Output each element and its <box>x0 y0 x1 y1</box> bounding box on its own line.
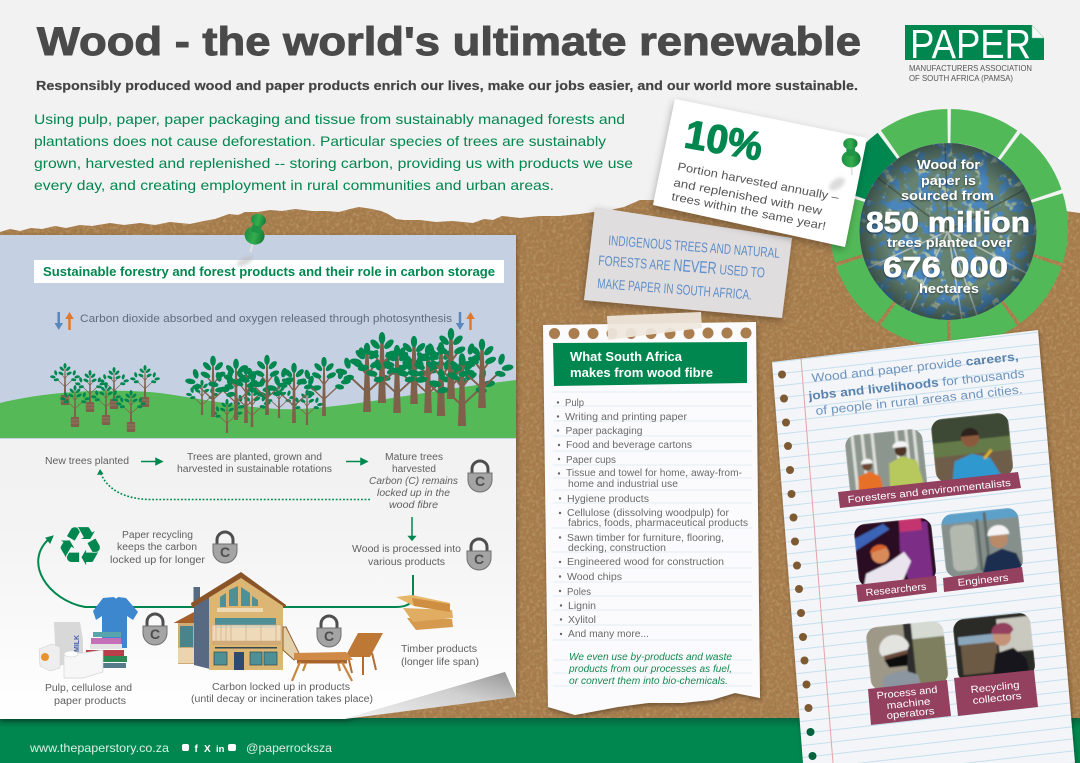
footer band <box>0 718 1080 763</box>
intro paragraph: Using pulp, paper, paper packaging and tissue from sustainably managed forests and <box>34 111 625 127</box>
logo: Paper Manufacturers Association: OF SOUTH AFRICA (PAMSA) <box>909 74 1013 83</box>
product list: Paper packaging <box>566 426 642 437</box>
by-products note: or convert them into bio-chemicals. <box>569 676 728 687</box>
grey note: indigenous trees: INDIGENOUS TREES AND NATURAL <box>608 232 781 261</box>
careers statement: of people in rural areas and cities. <box>815 382 1023 418</box>
ring caption: Wood for <box>917 158 980 172</box>
product list: Writing and printing paper <box>565 412 688 423</box>
punched holes <box>549 328 752 339</box>
paper products caption: Pulp, cellulose and <box>45 683 132 694</box>
label: recycling collectors <box>954 670 1038 716</box>
timber caption: Timber products <box>401 644 477 655</box>
lock: processing: C <box>474 551 484 567</box>
heading block <box>553 342 747 386</box>
intro paragraph <box>34 111 633 193</box>
product list: Hygiene products <box>567 494 649 505</box>
label: engineers: Engineers <box>957 573 1009 589</box>
product list: Poles <box>567 587 591 598</box>
lined paper: careers and livelihoods <box>772 330 1075 763</box>
grey note: indigenous trees: MAKE PAPER IN SOUTH AFRICA. <box>597 275 753 303</box>
wood processed caption <box>352 544 461 568</box>
social media icons <box>182 744 236 755</box>
notepad: what South Africa makes from wood fibre <box>543 322 760 715</box>
page curl <box>345 672 516 719</box>
product list <box>565 398 748 640</box>
photo: environmentalist <box>930 412 1014 484</box>
product list: And many more... <box>568 629 649 640</box>
product list: Wood chips <box>567 572 622 583</box>
careers statement: Wood and paper provide careers, <box>811 349 1019 385</box>
photosynthesis caption with arrows <box>54 312 475 330</box>
pin <box>827 138 861 193</box>
card: 10% harvested <box>653 99 867 247</box>
background: paper and cork board <box>0 200 1080 718</box>
process: mature trees harvested: locked up in the <box>377 488 450 499</box>
heading box: Sustainable forestry and forest products and their role in carbon storage <box>43 264 495 279</box>
paper recycling caption <box>110 530 206 566</box>
product list: Xylitol <box>568 615 596 626</box>
torn paper sheet <box>543 322 760 715</box>
careers statement <box>807 349 1025 418</box>
punched holes <box>778 370 816 760</box>
intro paragraph: every day, and creating employment in rural communities and urban areas. <box>34 177 554 193</box>
process: mature trees harvested: wood fibre <box>389 500 438 511</box>
label: foresters and environmentalists <box>838 472 1021 508</box>
lock: carbon in products <box>317 616 341 647</box>
heading block: What South Africa <box>570 350 683 364</box>
lock: recycling: C <box>220 544 230 560</box>
label: researchers: Researchers <box>865 582 927 599</box>
photo: recycling collector <box>953 613 1036 678</box>
lock: carbon <box>468 461 492 492</box>
paper recycling caption: keeps the carbon <box>117 542 197 553</box>
ring caption: hectares <box>919 282 979 296</box>
panel: sustainable forestry and carbon storage <box>0 235 516 719</box>
icon: timber house <box>174 572 301 670</box>
paper sheet <box>772 330 1075 763</box>
dotted return arrow <box>97 469 370 500</box>
bullet markers <box>557 401 562 635</box>
pin: panel <box>235 212 270 269</box>
card text: and replenished with new <box>672 177 824 218</box>
label: process and machine operators: Process and <box>876 685 938 702</box>
arrow <box>141 458 162 464</box>
carbon locked caption: (until decay or incineration takes place) <box>191 694 373 705</box>
by-products note <box>568 652 732 687</box>
process: mature trees harvested <box>369 452 458 511</box>
by-products note: products from our processes as fuel, <box>568 664 732 675</box>
carbon locked caption <box>191 682 373 705</box>
icon: garden furniture <box>292 633 383 681</box>
product list: Lignin <box>568 601 596 612</box>
product list: Cellulose (dissolving woodpulp) for <box>567 508 730 519</box>
wood processed caption: Wood is processed into <box>352 544 461 555</box>
grey note: indigenous trees <box>584 207 792 318</box>
photo: researcher <box>853 517 937 589</box>
process: sustainable rotations: Trees are planted, grown and <box>187 452 322 463</box>
panel background <box>0 235 516 719</box>
ring caption: sourced from <box>901 189 994 203</box>
process: sustainable rotations <box>177 452 332 475</box>
paper recycling caption: locked up for longer <box>110 555 206 566</box>
social media icons: f <box>194 744 198 755</box>
photo: foresters <box>845 429 927 491</box>
lock: carbon: C <box>475 473 485 489</box>
timber caption <box>401 644 479 668</box>
social media icons: in <box>216 744 225 755</box>
timber caption: (longer life span) <box>401 657 479 668</box>
intro paragraph: plantations does not cause deforestation. Particular species of trees are sustainably <box>34 133 606 149</box>
margin line <box>801 358 833 763</box>
icon: recycling symbol: ♻ <box>56 515 104 578</box>
heading box <box>34 260 504 283</box>
product list: home and industrial use <box>568 479 678 490</box>
lock: carbon in products: C <box>324 628 334 644</box>
carbon locked caption: Carbon locked up in products <box>212 682 350 693</box>
ring caption: 676 000 <box>883 252 1008 284</box>
social media icons: X <box>204 744 211 755</box>
lock: paper products <box>143 614 167 645</box>
ring caption: trees planted over <box>887 236 1012 250</box>
card text <box>670 161 840 233</box>
label: recycling collectors: collectors <box>972 691 1022 707</box>
logo: Paper Manufacturers Association: MANUFACTURERS ASSOCIATION <box>909 64 1032 73</box>
icon: paper and textile products <box>39 597 138 678</box>
social handle: @paperrocksza <box>246 741 332 755</box>
lock: processing <box>467 539 491 570</box>
saplings in pots <box>50 363 160 432</box>
ring caption: 850 million <box>866 207 1030 239</box>
process: mature trees harvested: Mature trees <box>385 452 443 463</box>
paper recycling caption: Paper recycling <box>122 530 193 541</box>
card text: trees within the same year! <box>670 191 827 233</box>
title: Wood - the world's ultimate renewable <box>37 20 861 64</box>
wood processed caption: various products <box>368 557 445 568</box>
process: mature trees harvested: harvested <box>392 464 436 475</box>
label: process and machine operators <box>868 680 951 725</box>
product list: decking, construction <box>568 543 666 554</box>
paper products caption <box>45 683 132 707</box>
product list: Food and beverage cartons <box>566 440 692 451</box>
ring caption <box>866 158 1030 296</box>
product list: Sawn timber for furniture, flooring, <box>567 533 724 544</box>
arrow <box>346 458 367 464</box>
icon: paper and textile products: MILK <box>74 635 81 652</box>
growing trees <box>185 355 351 433</box>
mature trees <box>335 328 514 426</box>
photo: engineer <box>940 507 1024 579</box>
process: sustainable rotations: harvested in sustainable rotations <box>177 464 332 475</box>
product list: Engineered wood for construction <box>567 557 724 568</box>
icon: timber planks <box>396 595 453 630</box>
forest canopy photo <box>858 141 1038 323</box>
lock: paper products: C <box>150 626 160 642</box>
product list: Paper cups <box>566 455 616 466</box>
heading block: makes from wood fibre <box>570 366 713 380</box>
ring segments <box>819 98 1079 358</box>
label: process and machine operators: machine <box>886 696 932 712</box>
product list: fabrics, foods, pharmaceutical products <box>568 518 748 529</box>
label: engineers <box>943 567 1024 592</box>
product list: Pulp <box>565 398 584 409</box>
by-products note: We even use by-products and waste <box>569 652 732 663</box>
process: new trees planted: New trees planted <box>45 456 129 467</box>
intro paragraph: grown, harvested and replenished -- storing carbon, providing us with products we use <box>34 155 633 171</box>
logo: Paper Manufacturers Association: PAPER <box>910 21 1031 67</box>
website address: www.thepaperstory.co.za <box>29 741 169 755</box>
photo: process operator <box>865 620 949 692</box>
careers statement: jobs and livelihoods for thousands <box>807 366 1025 403</box>
arrow down <box>409 517 415 540</box>
card text: Portion harvested annually – <box>676 161 840 204</box>
label: process and machine operators: operators <box>886 706 935 722</box>
product flow line <box>38 536 413 607</box>
big number: 10% <box>681 113 766 169</box>
ring caption: paper is <box>921 174 976 188</box>
tape strip <box>607 312 702 340</box>
subtitle: Responsibly produced wood and paper products enrich our lives, make our jobs easier, and our world more sustainable. <box>36 78 858 93</box>
photosynthesis caption with arrows: Carbon dioxide absorbed and oxygen released through photosynthesis <box>80 313 453 325</box>
label: researchers <box>856 576 937 602</box>
lock: recycling <box>213 532 237 563</box>
label: recycling collectors: Recycling <box>970 680 1020 696</box>
label: foresters and environmentalists: Foresters and environmentalists <box>847 478 1011 506</box>
product list: Tissue and towel for home, away-from- <box>566 468 742 479</box>
rule lines <box>553 392 752 686</box>
paper products caption: paper products <box>54 696 126 707</box>
grey note: indigenous trees: FORESTS ARE NEVER USED TO <box>598 250 766 282</box>
ring statistic: wood for paper <box>831 109 1068 344</box>
process: mature trees harvested: Carbon (C) remains <box>369 476 458 487</box>
